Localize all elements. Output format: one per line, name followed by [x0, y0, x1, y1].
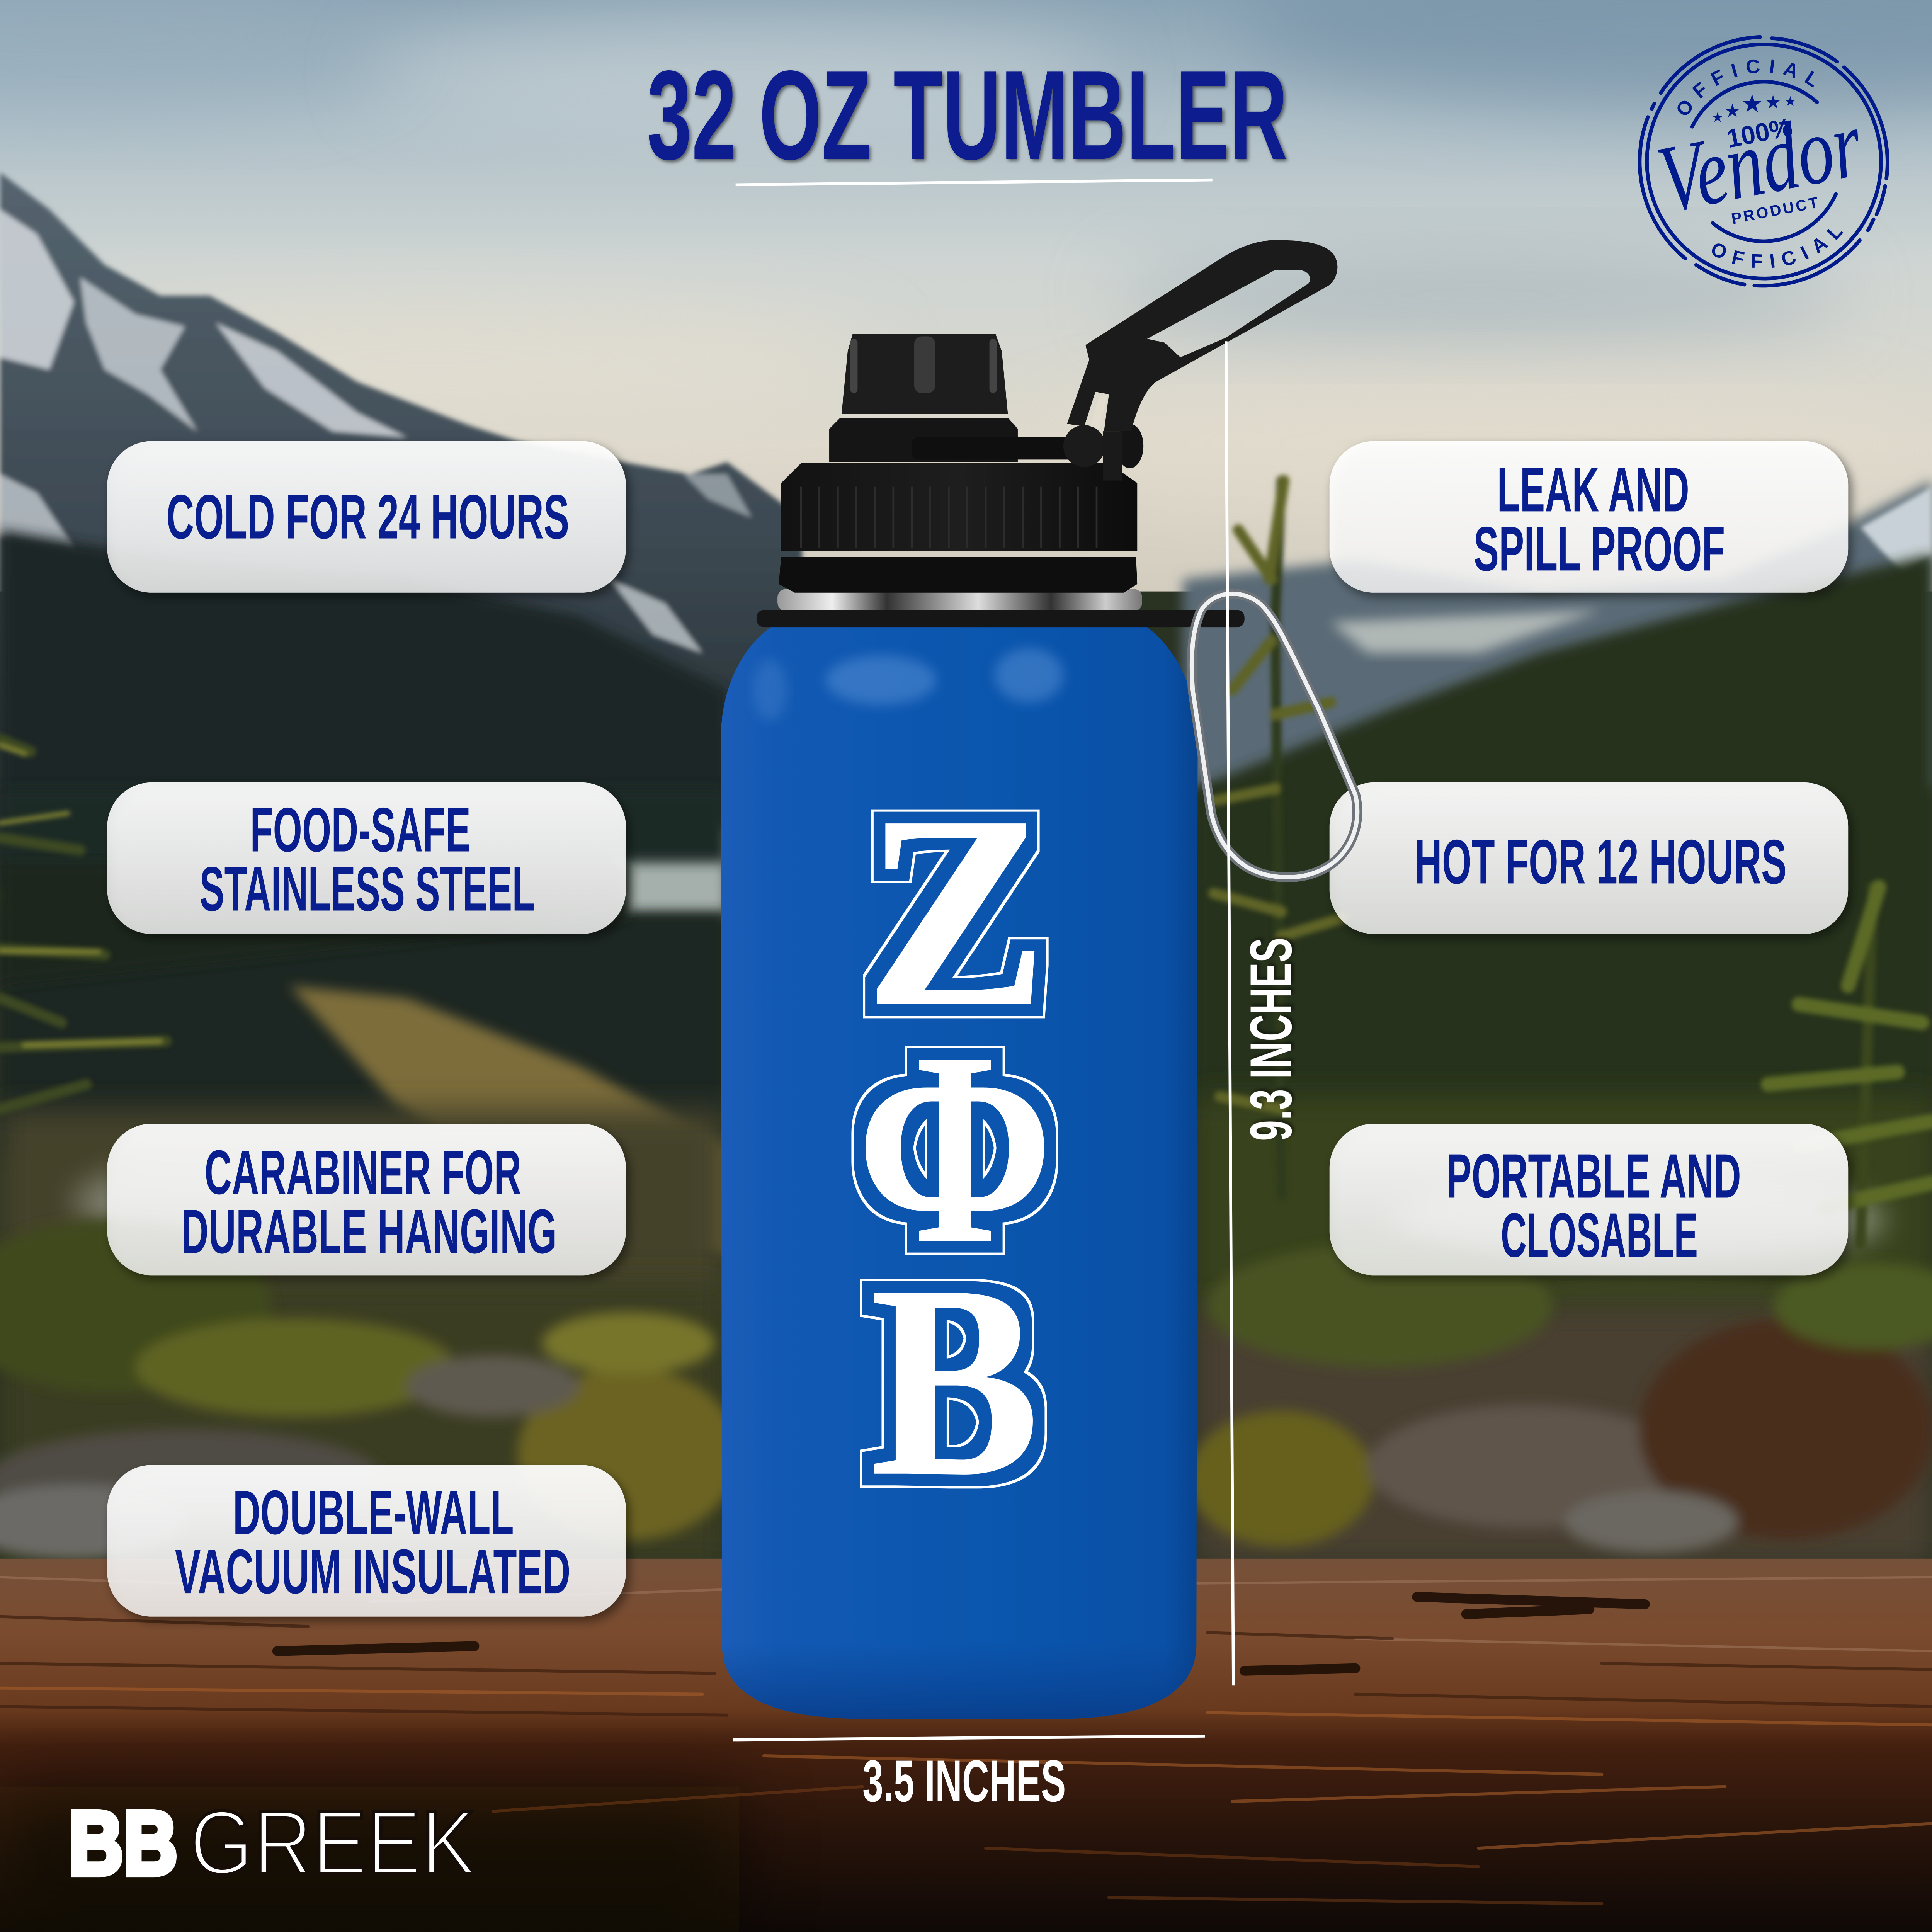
trees: [0, 481, 1932, 1245]
pill: food-safe stainless steel: [107, 782, 626, 934]
bottle body: [721, 622, 1197, 1719]
title: 32 OZ TUMBLER: [647, 44, 1287, 186]
knurled lid: [781, 463, 1137, 551]
pill: portable and closable: PORTABLE AND: [1447, 1141, 1741, 1211]
pill: double-wall vacuum insulated: DOUBLE-WALL: [233, 1478, 514, 1548]
badge: official 100% vendor product: 100%: [1724, 112, 1795, 153]
logo: BB Greek: GREEK: [190, 1792, 476, 1894]
logo: BB Greek: BB: [69, 1793, 177, 1893]
height dimension line: [1226, 341, 1233, 1685]
pill: food-safe stainless steel: STAINLESS STEEL: [200, 854, 535, 924]
pill: leak and spill proof: [1330, 441, 1848, 593]
height label: 9.3 INCHES: [1238, 938, 1304, 1141]
width label: 3.5 INCHES: [862, 1748, 1066, 1814]
letter zeta: Z: [864, 758, 1049, 1064]
lid assembly: [757, 240, 1337, 627]
pill: hot for 12 hours: [1330, 782, 1848, 934]
badge: official 100% vendor product: ★: [1711, 110, 1724, 126]
pill: food-safe stainless steel: FOOD-SAFE: [250, 795, 471, 865]
carry handle: [1067, 240, 1337, 431]
logo: BB Greek: [69, 1792, 476, 1894]
spout cap: [842, 334, 1008, 414]
rubber strap flange: [757, 610, 1245, 627]
badge: official 100% vendor product: ★: [1741, 90, 1763, 118]
badge: official 100% vendor product: ★: [1784, 94, 1796, 109]
lake and forest: [616, 828, 727, 917]
hinge strap: [912, 437, 1075, 459]
steel ring: [777, 589, 1142, 611]
badge: official 100% vendor product: ★: [1765, 92, 1781, 113]
right distant mountains: [1183, 481, 1932, 789]
collar: [829, 418, 1018, 462]
badge: official 100% vendor product: ★: [1724, 100, 1741, 122]
title underline: [736, 180, 1213, 185]
pill: cold for 24 hours: [107, 441, 626, 593]
foreground bushes and rocks: [0, 1281, 727, 1565]
badge: official 100% vendor product: PRODUCT: [1730, 194, 1821, 228]
letter phi: Φ: [856, 995, 1053, 1301]
pill: carabiner for durable hanging: [107, 1124, 626, 1275]
carabiner clip: [1192, 594, 1357, 877]
pill: carabiner for durable hanging: DURABLE HANGING: [181, 1197, 557, 1267]
pill: leak and spill proof: LEAK AND: [1497, 455, 1689, 525]
wooden table: [0, 1559, 1932, 1932]
pill: double-wall vacuum insulated: [107, 1465, 626, 1617]
pill: cold for 24 hours: COLD FOR 24 HOURS: [166, 482, 569, 552]
pill: carabiner for durable hanging: CARABINER FOR: [204, 1138, 521, 1208]
greek letters: Zeta Phi Beta: [856, 758, 1053, 1534]
badge: official 100% vendor product: OFFICIAL: [1704, 212, 1857, 285]
letter beta: B: [870, 1228, 1040, 1534]
badge: official 100% vendor product: Vendor: [1650, 89, 1870, 233]
pill: double-wall vacuum insulated: VACUUM INSULATED: [175, 1537, 570, 1607]
width dimension line: [733, 1736, 1205, 1740]
badge: official 100% vendor product: [1640, 37, 1888, 286]
pill: portable and closable: [1330, 1124, 1848, 1275]
feature pills: [107, 441, 1848, 1617]
tumbler bottle: [721, 240, 1337, 1719]
pill: portable and closable: CLOSABLE: [1501, 1201, 1698, 1270]
dark lower ring: [779, 557, 1137, 593]
badge: official 100% vendor product: OFFICIAL: [1664, 41, 1833, 124]
pill: leak and spill proof: SPILL PROOF: [1474, 514, 1725, 584]
